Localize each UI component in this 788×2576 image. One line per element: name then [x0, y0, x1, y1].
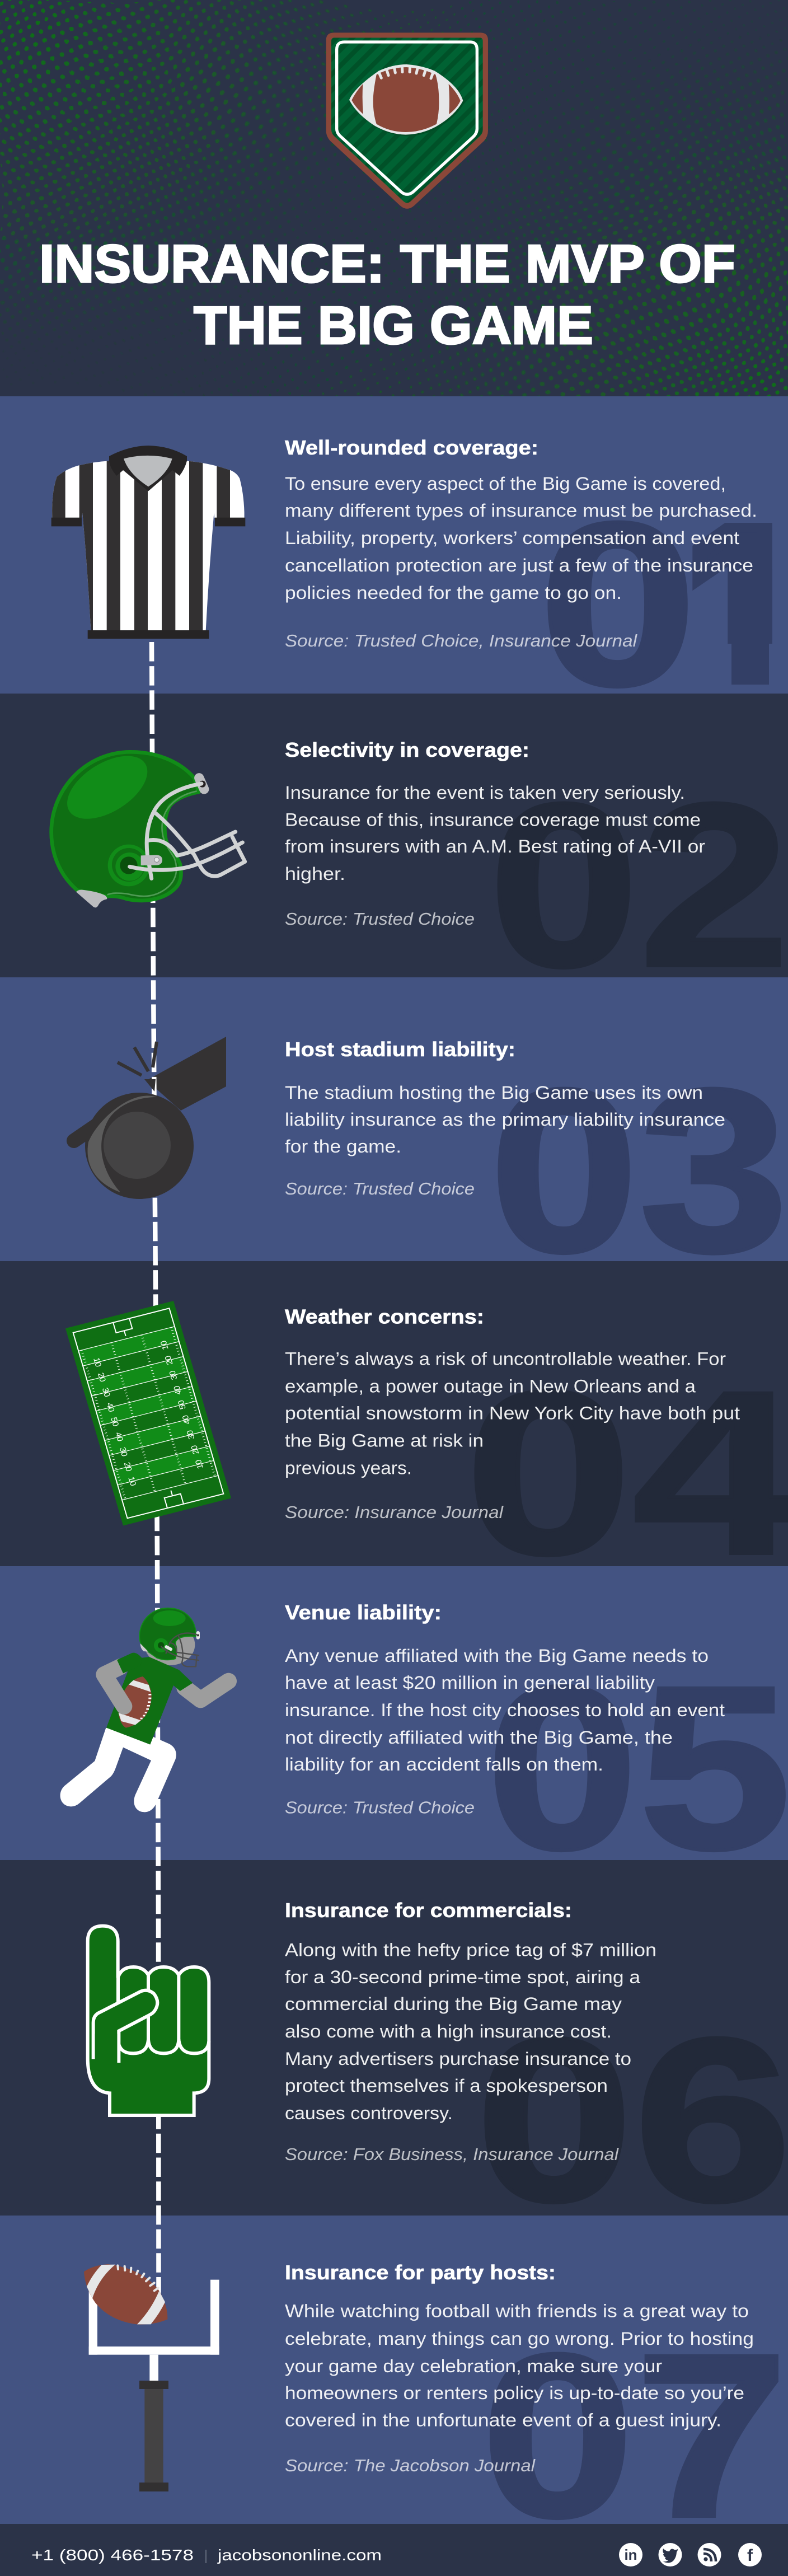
body text: for a 30-second prime-time spot, airing a — [285, 1967, 640, 1987]
source: Source: Insurance Journal — [285, 1502, 504, 1522]
panel: 06 insurance for commercials — [0, 1860, 788, 2250]
number 01: 0 — [538, 474, 697, 734]
body text: for the game. — [285, 1136, 401, 1156]
number 02: 02 — [489, 755, 788, 1015]
body text: To ensure every aspect of the Big Game is covered, — [285, 474, 726, 494]
title: INSURANCE: THE MVP OF — [39, 234, 735, 294]
body text: covered in the unfortunate event of a guest injury. — [285, 2410, 721, 2430]
icon: football field: 40 — [172, 1385, 184, 1396]
source: Source: The Jacobson Journal — [285, 2456, 536, 2475]
body text — [285, 1083, 725, 1156]
icon: football field: 30 — [118, 1446, 129, 1458]
icon: football field: 10 — [159, 1339, 171, 1351]
title — [39, 234, 735, 355]
body text: Many advertisers purchase insurance to — [285, 2049, 631, 2069]
heading: Insurance for party hosts: — [285, 2261, 556, 2284]
body text: your game day celebration, make sure your — [285, 2356, 662, 2376]
body text: insurance. If the host city chooses to hold an event — [285, 1700, 725, 1720]
body text: many different types of insurance must be purchased. — [285, 500, 757, 521]
source: Source: Trusted Choice — [285, 1798, 475, 1817]
icon: football field — [65, 1301, 231, 1526]
body text: There’s always a risk of uncontrollable weather. For — [285, 1349, 726, 1369]
body text: policies needed for the game to go on. — [285, 583, 622, 603]
icon: football field: 30 — [185, 1429, 197, 1440]
icon: whistle mouthpiece — [147, 1037, 226, 1111]
icon: linkedin — [619, 2543, 642, 2566]
icon: football field: 20 — [163, 1355, 175, 1366]
contact phone: +1 (800) 466-1578 — [31, 2546, 194, 2564]
body text: celebrate, many things can go wrong. Prior to hosting — [285, 2329, 754, 2349]
panel: footer — [0, 2524, 788, 2576]
icon: football field: 10 — [126, 1476, 138, 1487]
icon: facebook: f — [747, 2546, 753, 2565]
panel: header — [0, 0, 788, 431]
icon: running football player — [60, 1608, 228, 1812]
body text — [285, 2301, 754, 2430]
body text — [285, 474, 757, 603]
icon: twitter — [658, 2543, 682, 2566]
panel: 05 venue liability — [0, 1566, 788, 1898]
icon: referee jersey — [50, 446, 246, 639]
source: Source: Trusted Choice — [285, 909, 475, 929]
body text: the Big Game at risk in — [285, 1431, 484, 1451]
body text: homeowners or renters policy is up-to-date so you’re — [285, 2383, 744, 2403]
body text: not directly affiliated with the Big Game, the — [285, 1727, 673, 1748]
icon: football field: 20 — [189, 1444, 201, 1455]
icon: football field: 40 — [181, 1414, 193, 1425]
body text: Insurance for the event is taken very seriously. — [285, 783, 685, 803]
icon: football field: 50 — [176, 1399, 188, 1411]
body text: higher. — [285, 864, 345, 884]
body text: The stadium hosting the Big Game uses its own — [285, 1083, 703, 1103]
icon: football field: 20 — [122, 1461, 134, 1473]
body text: example, a power outage in New Orleans and a — [285, 1376, 696, 1396]
body text: Because of this, insurance coverage must come — [285, 809, 701, 830]
heading: Host stadium liability: — [285, 1038, 515, 1061]
icon: whistle — [74, 1042, 194, 1199]
icon: football field: 20 — [96, 1371, 107, 1383]
source: Source: Trusted Choice — [285, 1179, 475, 1198]
number 07: 07 — [481, 2306, 788, 2566]
dashed route line — [152, 642, 159, 2298]
icon: foam finger — [88, 1926, 209, 2115]
website: jacobsononline.com — [217, 2546, 382, 2564]
heading: Well-rounded coverage: — [285, 436, 538, 459]
body text: Liability, property, workers’ compensation and event — [285, 528, 739, 548]
body text: liability for an accident falls on them. — [285, 1754, 603, 1774]
icon: facebook — [738, 2543, 762, 2566]
body text: Any venue affiliated with the Big Game needs to — [285, 1646, 709, 1666]
body text: Along with the hefty price tag of $7 million — [285, 1940, 656, 1960]
icon: linkedin: in — [624, 2546, 637, 2563]
heading: Insurance for commercials: — [285, 1899, 572, 1922]
icon: football field: 30 — [167, 1370, 179, 1381]
heading: Selectivity in coverage: — [285, 738, 529, 761]
heading: Venue liability: — [285, 1601, 442, 1624]
body text: commercial during the Big Game may — [285, 1994, 622, 2014]
panel: 02 selectivity in coverage — [0, 694, 788, 1015]
icon: football field: 30 — [100, 1387, 112, 1398]
body text: potential snowstorm in New York City have both put — [285, 1403, 740, 1423]
separator — [206, 2550, 207, 2563]
source: Source: Trusted Choice, Insurance Journal — [285, 631, 637, 650]
body text — [285, 1349, 740, 1478]
number 05: 05 — [486, 1638, 788, 1898]
panel: 03 host stadium liability — [0, 977, 788, 1301]
body text — [285, 783, 705, 884]
body text: also come with a high insurance cost. — [285, 2021, 612, 2041]
body text: from insurers with an A.M. Best rating of A-VII or — [285, 836, 705, 856]
source: Source: Fox Business, Insurance Journal — [285, 2144, 619, 2164]
body text: previous years. — [285, 1458, 412, 1478]
number 03: 03 — [489, 1041, 788, 1301]
heading: Weather concerns: — [285, 1305, 484, 1328]
body text: causes controversy. — [285, 2103, 453, 2123]
title: THE BIG GAME — [194, 296, 593, 355]
body text: liability insurance as the primary liability insurance — [285, 1109, 725, 1130]
number 06: 06 — [475, 1990, 788, 2250]
icon: football field: 40 — [105, 1402, 116, 1413]
panel: 07 insurance for party hosts — [0, 2216, 788, 2566]
body text: have at least $20 million in general liability — [285, 1673, 655, 1693]
body text — [285, 1940, 656, 2123]
panel: 04 weather concerns — [0, 1261, 788, 1603]
icon: football badge — [326, 32, 488, 209]
icon: football field: 10 — [194, 1459, 205, 1470]
number 04: 04 — [465, 1343, 788, 1603]
panel: 01 well-rounded coverage — [0, 396, 788, 694]
body text: While watching football with friends is a great way to — [285, 2301, 749, 2321]
icon: football helmet — [51, 743, 245, 907]
body text: protect themselves if a spokesperson — [285, 2076, 608, 2096]
body text: cancellation protection are just a few of the insurance — [285, 555, 753, 575]
icon: rss — [697, 2543, 721, 2566]
icon: football field: 50 — [109, 1416, 120, 1427]
icon: football field: 40 — [113, 1431, 125, 1442]
body text — [285, 1646, 725, 1774]
icon: football field: 10 — [91, 1357, 103, 1368]
icon: goal post with football — [84, 2264, 219, 2491]
